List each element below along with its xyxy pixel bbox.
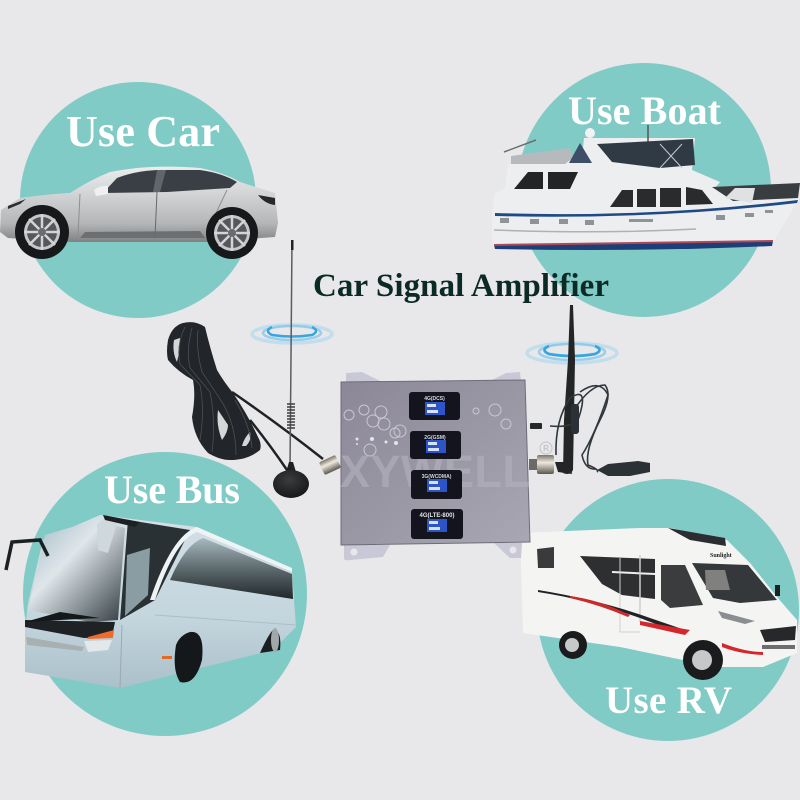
signal waves left <box>252 325 332 343</box>
upper windows <box>514 172 543 189</box>
side windows <box>170 538 293 599</box>
registered mark: R <box>543 444 549 453</box>
mounting flanges <box>346 372 382 382</box>
band 4G DCS <box>409 392 460 420</box>
side window <box>580 556 655 599</box>
circle: RV <box>537 479 799 741</box>
flybridge windows <box>569 143 592 163</box>
tender on roof <box>511 148 573 164</box>
windshield <box>692 563 777 603</box>
door <box>120 520 190 620</box>
antenna blade <box>563 305 575 474</box>
cable coil <box>167 322 261 460</box>
flower decoration <box>344 404 511 456</box>
antenna foot <box>555 462 572 474</box>
watermark XYWELL: XYWELL <box>340 446 530 497</box>
lead cables <box>232 392 323 459</box>
magnetic base <box>286 462 296 472</box>
registered mark <box>540 442 552 454</box>
amplifier unit <box>340 372 530 560</box>
left connector <box>319 455 341 475</box>
cigarette plug <box>597 461 650 476</box>
signal waves right <box>527 343 617 363</box>
RV illustration <box>520 528 797 680</box>
circle: boat <box>517 63 771 317</box>
spring <box>287 404 295 428</box>
portholes <box>500 210 773 225</box>
orange indicator <box>87 630 114 639</box>
front wheel <box>15 205 69 259</box>
left magnetic antenna with cable <box>167 240 341 498</box>
rear wheel <box>559 631 587 659</box>
mirror <box>775 585 780 596</box>
grille and lamps <box>760 626 796 642</box>
jack <box>530 423 542 429</box>
right connector <box>537 455 554 474</box>
heading: Use RV: Use RV <box>605 679 732 722</box>
mirror <box>6 540 48 570</box>
rear wheel <box>206 207 258 259</box>
circle: car <box>20 82 256 318</box>
whip tip <box>291 240 294 250</box>
brand: Sunlight <box>710 553 732 559</box>
boat illustration <box>492 125 800 250</box>
front wheel <box>683 640 723 680</box>
band 2G GSM: 2G(GSM) <box>424 435 446 441</box>
band 3G CDMA <box>411 470 462 499</box>
windshield <box>28 520 125 622</box>
bus illustration <box>6 515 296 688</box>
right antenna with power cable <box>529 305 650 476</box>
wheels <box>175 632 202 683</box>
whip <box>290 241 292 470</box>
title: Car Signal Amplifier <box>313 268 609 304</box>
connector neck <box>529 459 537 470</box>
case <box>341 380 530 545</box>
heading: Use Car: Use Car <box>66 107 220 156</box>
band 4G LTE-800 <box>411 509 463 539</box>
decal stripes <box>538 590 685 634</box>
grille <box>25 620 115 638</box>
band 4G DCS: 4G(DCS) <box>424 396 445 402</box>
cab side window <box>661 565 703 608</box>
power wires <box>550 385 608 472</box>
car illustration <box>0 167 278 259</box>
band 3G CDMA: 3G(WCDMA) <box>422 474 452 480</box>
band 2G GSM <box>410 431 461 459</box>
heading: Use Boat: Use Boat <box>568 88 722 133</box>
lower windows <box>610 190 633 207</box>
inline module <box>571 404 579 434</box>
upper window right <box>548 172 578 189</box>
heading: Use Bus: Use Bus <box>104 467 240 512</box>
bow rail <box>712 183 800 201</box>
circle: bus <box>23 452 307 736</box>
band 4G LTE-800: 4G(LTE-800) <box>420 513 454 519</box>
